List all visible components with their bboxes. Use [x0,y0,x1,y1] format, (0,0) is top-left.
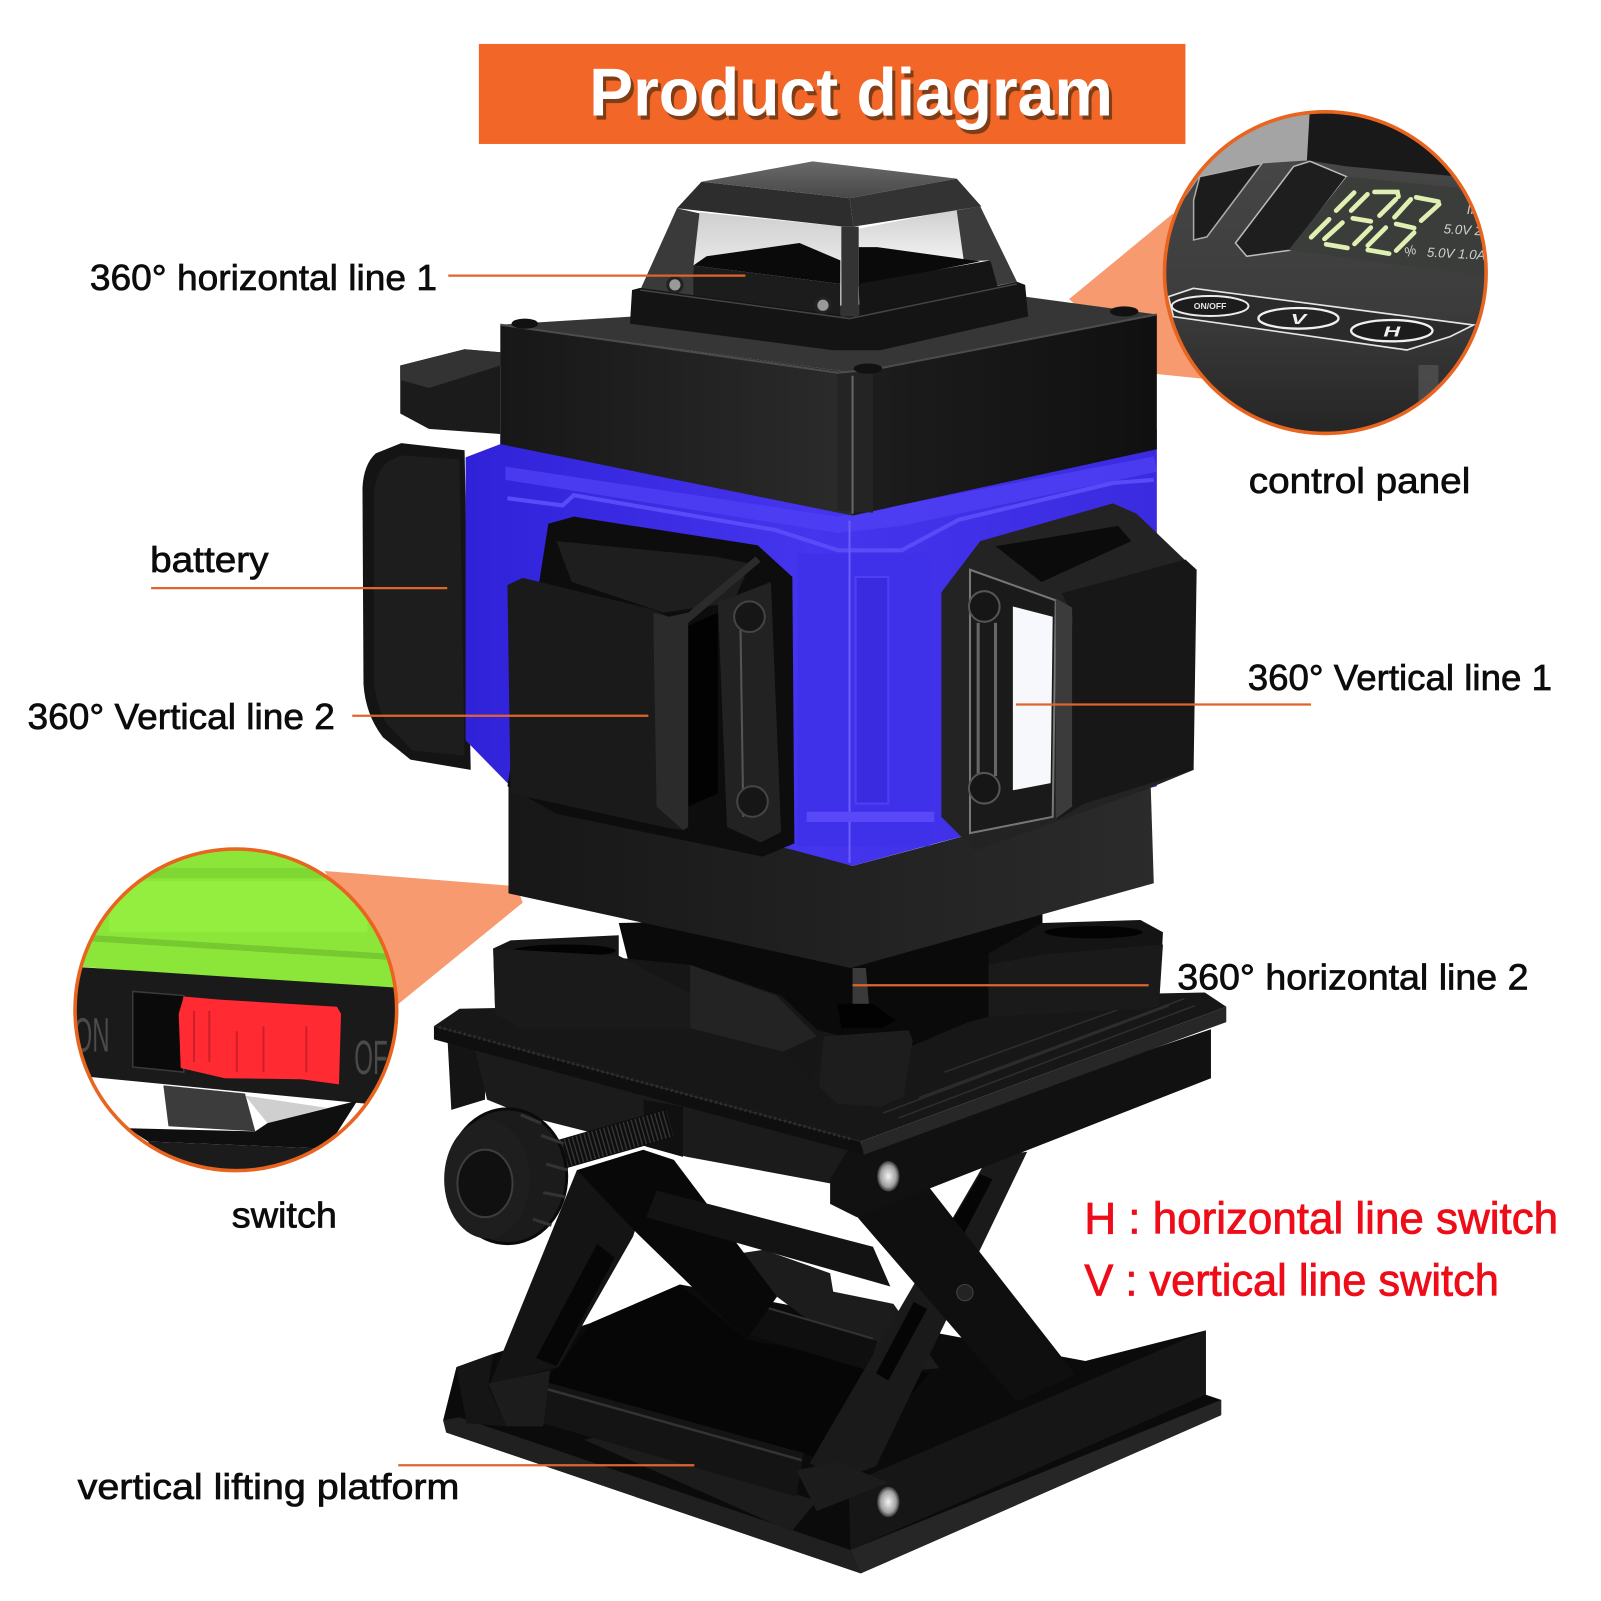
lower rod with joint [488,1370,804,1497]
label: vertical lifting platform: vertical lifting platform [78,1467,459,1507]
adjustment screw thread [560,1123,670,1155]
platform top plate [434,992,1226,1217]
lower body highlight [1418,365,1438,402]
label: switch: switch [232,1195,337,1235]
V button: V [1291,311,1309,328]
legend: button key: V : vertical line switch [1084,1255,1499,1306]
label: 360 vertical line 1: 360° Vertical line 1 [1248,658,1552,698]
label: 360 horizontal line 1: 360° horizontal line 1 [90,258,437,298]
H button: H [1383,323,1401,340]
display digits and readings: II [1467,202,1475,217]
touch button strip [1168,288,1473,350]
right laser module [941,503,1197,851]
rear control stub [400,349,500,434]
switch slot [133,991,184,1072]
battery pack [362,443,471,770]
display recess [1235,161,1347,256]
blue housing band [466,429,1157,866]
H button [1351,320,1432,341]
power button: ON/OFF [1194,301,1226,311]
label: control panel: control panel [1249,461,1470,501]
callout circle: control panel detail [1159,102,1496,444]
red rocker [179,997,341,1084]
scissor arms front pair [796,1152,1075,1511]
middle rod [646,1191,890,1287]
upper grey shell [1185,114,1310,198]
lower housing block [508,776,1154,968]
adjustment screw nut [643,1100,683,1157]
display digits and readings: % [1402,242,1418,260]
power button [1172,296,1248,316]
label: 360 horizontal line 2: 360° horizontal line 2 [1177,957,1529,997]
title banner: Product diagram [589,55,1113,130]
lifting platform base [443,1250,1221,1573]
callout circle: switch detail [73,847,398,1172]
side recess [1194,163,1262,240]
green housing [82,850,394,988]
title banner [479,44,1185,144]
callout wedge: switch [325,871,523,1006]
V button [1258,308,1338,329]
adjustment knob [444,1109,568,1244]
lower jack detail [163,1085,255,1131]
product: laser level on lifting platform [362,161,1226,1573]
mount feet [493,914,1163,1107]
label: 360 vertical line 2: 360° Vertical line 2 [28,697,335,737]
left laser module [507,517,794,857]
top housing block [500,296,1157,516]
display digits and readings: 5.0V 2 [1443,221,1483,238]
black housing top [1306,114,1452,176]
LCD panel [1288,176,1467,250]
callout wedge: control panel [1069,213,1215,380]
display digits and readings: 5.0V 1.0A [1427,245,1486,263]
top laser window cap [630,161,1028,350]
OFF label: OF [354,1031,388,1086]
black switch body [76,967,395,1104]
label: battery: battery [150,540,269,580]
legend: button key [1084,1192,1558,1306]
legend: button key: H : horizontal line switch [1084,1192,1558,1243]
scissor arms back pair [490,1150,777,1384]
display digits and readings [1168,192,1486,402]
ON label: ON [74,1009,110,1063]
